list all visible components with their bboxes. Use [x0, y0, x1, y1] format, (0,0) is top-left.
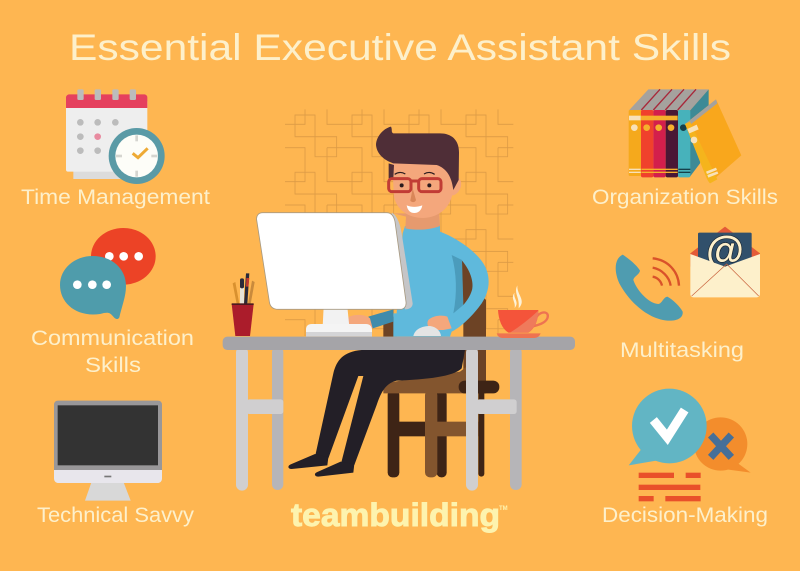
label: Multitasking: Multitasking — [620, 339, 744, 362]
label: Decision-Making: Decision-Making — [602, 504, 768, 527]
shoes — [288, 454, 354, 477]
hair — [376, 127, 459, 190]
hands — [348, 315, 452, 330]
smile — [407, 205, 422, 213]
coffee cup and steam — [497, 285, 548, 338]
eyebrows — [395, 172, 435, 174]
central illustration: person at desk — [223, 109, 575, 491]
label: Time Management: Time Management — [21, 186, 210, 209]
label: Communication Skills: Communication — [31, 327, 194, 350]
icon: phone and envelope — [616, 227, 760, 321]
pencil cup — [232, 273, 255, 336]
desk — [223, 337, 575, 491]
icon: desktop computer — [54, 401, 162, 501]
icon: speech bubbles — [60, 228, 156, 319]
nose — [410, 188, 416, 202]
monitor — [257, 213, 413, 337]
icon: phone and envelope: @ — [706, 229, 744, 272]
icon: calendar and clock — [66, 89, 165, 184]
label: Communication Skills — [31, 327, 194, 377]
glasses — [389, 179, 441, 192]
sweater — [393, 225, 489, 337]
label: Organization Skills: Organization Skills — [592, 186, 778, 209]
title: Essential Executive Assistant Skills — [69, 27, 731, 68]
mouse — [413, 326, 441, 336]
label: Technical Savvy: Technical Savvy — [37, 504, 195, 527]
icon: decision bubbles — [629, 389, 751, 501]
sleeve shadow and chair gap — [452, 255, 473, 313]
chair — [383, 260, 499, 477]
head — [376, 127, 461, 230]
icon: books — [629, 89, 741, 183]
logo: teambuilding: teambuilding — [291, 497, 500, 533]
trousers — [315, 350, 465, 465]
logo: teambuilding: TM — [499, 506, 508, 512]
eyes — [400, 183, 404, 187]
background circuit pattern — [285, 109, 513, 336]
label: Communication Skills: Skills — [85, 354, 141, 377]
